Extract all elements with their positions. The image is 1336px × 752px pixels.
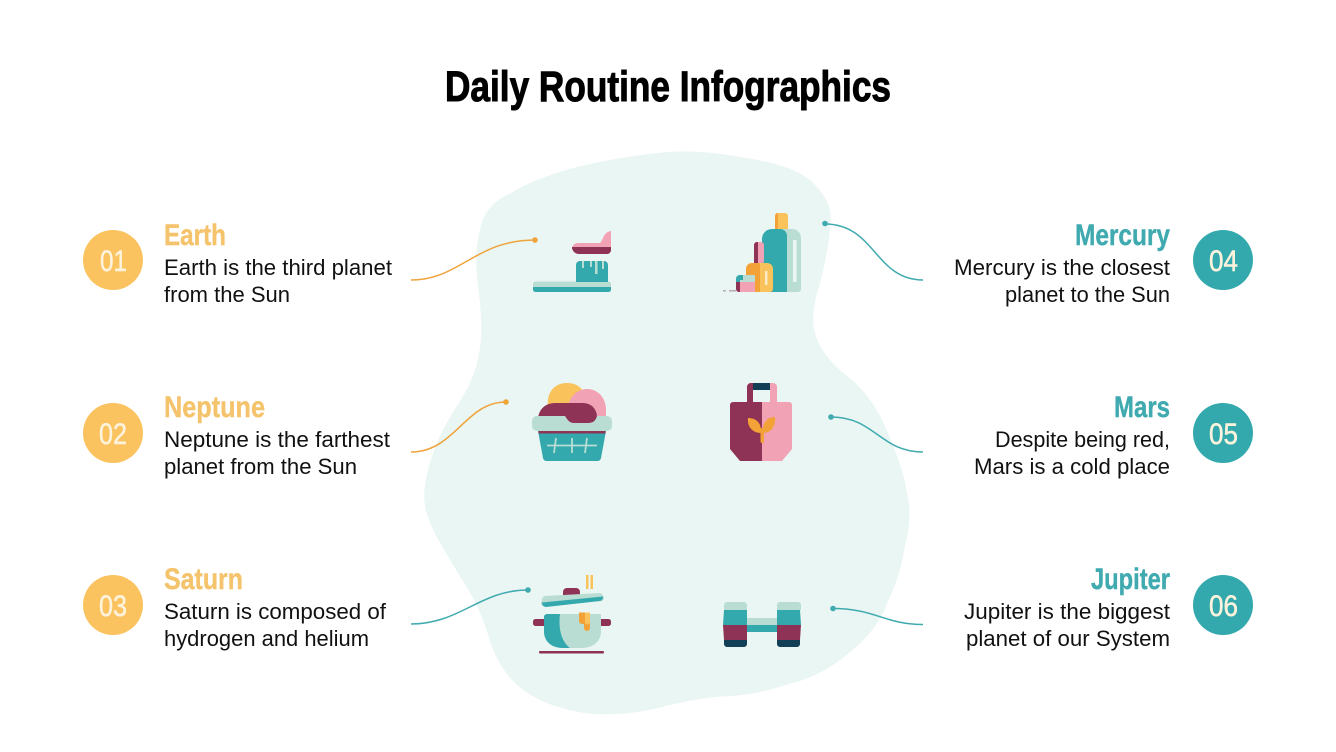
- description: Neptune: planet from the Sun: [164, 454, 357, 479]
- description: Mercury: Mercury is the closest: [954, 255, 1170, 280]
- number badge 02: [83, 403, 143, 463]
- description: Jupiter: planet of our System: [966, 626, 1170, 651]
- number badge 05: 05: [1209, 418, 1238, 451]
- heading: Jupiter: Jupiter: [1091, 563, 1170, 596]
- connector: Jupiter to dumbbell: [830, 606, 923, 624]
- number badge 05: [1193, 403, 1253, 463]
- description: Earth: Earth is the third planet: [164, 255, 392, 280]
- item 02: Neptune: [83, 391, 390, 479]
- heading: Mars: Mars: [1114, 391, 1170, 424]
- description: Saturn: hydrogen and helium: [164, 626, 369, 651]
- item 03: Saturn: [83, 563, 387, 651]
- description: Saturn: Saturn is composed of: [164, 599, 387, 624]
- description: Earth: [164, 255, 392, 307]
- icon: tote bag: [730, 383, 792, 461]
- connector: Saturn to pot: [411, 587, 531, 624]
- number badge 04: [1193, 230, 1253, 290]
- description: Earth: from the Sun: [164, 282, 290, 307]
- heading: Mercury: Mercury: [1075, 219, 1170, 252]
- description: Neptune: Neptune is the farthest: [164, 427, 390, 452]
- description: Mars: Mars is a cold place: [974, 454, 1170, 479]
- description: Jupiter: Jupiter is the biggest: [964, 599, 1170, 624]
- icon: toothbrush: [533, 231, 611, 292]
- icon: laundry basket: [532, 383, 612, 461]
- title: Daily Routine Infographics: [445, 63, 891, 111]
- item 05: Mars: [974, 391, 1253, 479]
- icon: toiletry bottles: [723, 213, 801, 292]
- description: Mars: Despite being red,: [995, 427, 1170, 452]
- number badge 04: 04: [1209, 245, 1238, 278]
- connector: Neptune to basket: [411, 399, 509, 452]
- number badge 06: [1193, 575, 1253, 635]
- number badge 06: 06: [1209, 590, 1238, 623]
- number badge 03: 03: [99, 590, 127, 623]
- heading: Earth: Earth: [164, 219, 226, 252]
- description: Jupiter: [964, 599, 1170, 651]
- item 06: Jupiter: [964, 563, 1253, 651]
- number badge 01: [83, 230, 143, 290]
- heading: Neptune: Neptune: [164, 391, 265, 424]
- number badge 01: 01: [100, 245, 127, 278]
- description: Mercury: planet to the Sun: [1005, 282, 1170, 307]
- item 01: Earth: [83, 219, 392, 307]
- description: Neptune: [164, 427, 390, 479]
- number badge 03: [83, 575, 143, 635]
- icon: cooking pot: [533, 575, 611, 654]
- description: Mercury: [954, 255, 1170, 307]
- number badge 02: 02: [99, 418, 127, 451]
- connector: Earth to toothbrush: [411, 237, 538, 280]
- description: Mars: [974, 427, 1170, 479]
- heading: Saturn: Saturn: [164, 563, 243, 596]
- item 04: Mercury: [954, 219, 1253, 307]
- connector: Mars to bag: [828, 414, 923, 452]
- icon: dumbbell: [723, 602, 801, 647]
- connector: Mercury to bottles: [822, 221, 923, 280]
- background blob: [424, 151, 910, 714]
- description: Saturn: [164, 599, 387, 651]
